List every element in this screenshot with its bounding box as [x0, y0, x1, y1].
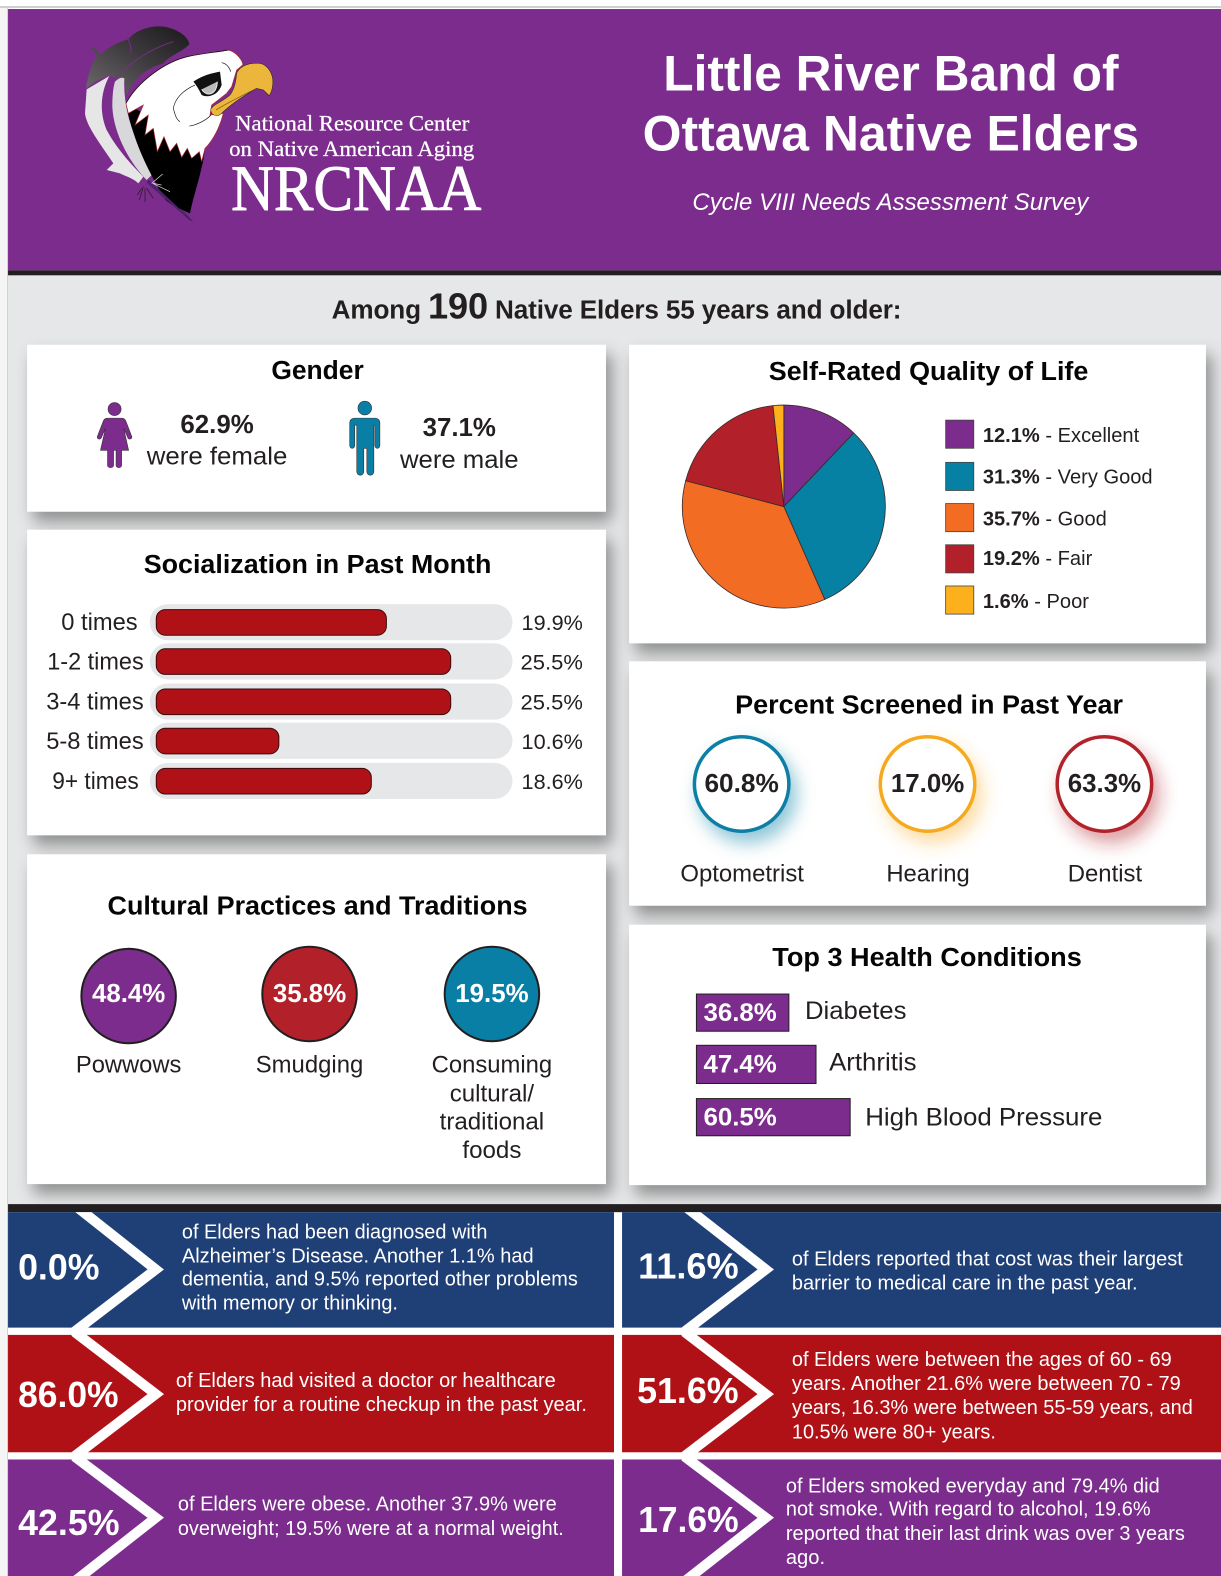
- bar chart: socialization: 10.6%: [522, 731, 583, 754]
- text: age groups: years. Another 21.6% were between 70 - 79: [792, 1373, 1181, 1395]
- text: memory problems: Alzheimer’s Disease. Another 1.1% had: [182, 1245, 534, 1267]
- stat: 0.0%: 0.0%: [18, 1246, 99, 1287]
- title: Little River Band of: [663, 45, 1119, 101]
- callout: cost barrier: [622, 1212, 1221, 1328]
- bar: diabetes: [696, 994, 906, 1031]
- header banner: [8, 9, 1221, 275]
- panel: screenings: [629, 661, 1206, 906]
- bar chart: socialization: 25.5%: [521, 651, 583, 674]
- bar chart: socialization: [46, 604, 583, 799]
- bar chart: socialization: 0 times: [61, 609, 138, 636]
- logo text: [229, 111, 481, 224]
- stat: 51.6%: 51.6%: [637, 1370, 739, 1411]
- logo text: National Resource Center: [235, 111, 470, 136]
- bar chart: socialization: 3-4 times: [46, 689, 144, 716]
- stat: powwows: Powwows: [76, 1051, 181, 1078]
- heading: socialization: Socialization in Past Month: [144, 549, 491, 579]
- text: routine checkup: [176, 1370, 587, 1416]
- text: weight: [178, 1494, 564, 1540]
- stat: 42.5%: 42.5%: [18, 1502, 120, 1543]
- title: Ottawa Native Elders: [643, 105, 1139, 161]
- icon: eagle with feathers: [85, 26, 273, 222]
- bar chart: socialization: 19.9%: [522, 612, 583, 635]
- stat: smudging: Smudging: [256, 1051, 363, 1078]
- text: smoking and alcohol: ago.: [786, 1547, 825, 1569]
- legend: quality of life: 12.1% - Excellent: [983, 425, 1140, 447]
- stat: optometrist: 60.8%: [704, 768, 779, 798]
- stat: smudging: 35.8%: [273, 978, 346, 1008]
- bar chart: socialization: 1-2 times: [47, 648, 144, 675]
- stat: male: 37.1%: [423, 412, 496, 442]
- callout: smoking and alcohol: [622, 1459, 1221, 1576]
- bar: arthritis: 47.4%: [703, 1050, 777, 1078]
- stat: female: 62.9%: [180, 409, 254, 439]
- bar: arthritis: [696, 1045, 917, 1084]
- heading: screenings: Percent Screened in Past Year: [735, 690, 1123, 720]
- text: memory problems: of Elders had been diagnosed with: [182, 1221, 487, 1243]
- stat: traditional foods: 19.5%: [455, 978, 529, 1008]
- bar: high blood pressure: [696, 1099, 1102, 1136]
- panel: health conditions: [629, 925, 1206, 1185]
- heading: gender: Gender: [271, 355, 364, 385]
- heading: quality of life: Self-Rated Quality of Life: [769, 356, 1088, 386]
- bar: high blood pressure: 60.5%: [703, 1104, 777, 1132]
- stat: traditional foods: [432, 947, 552, 1164]
- stat: female: were female: [146, 442, 287, 470]
- stat: powwows: [76, 949, 181, 1078]
- callout: memory problems: [8, 1212, 614, 1328]
- bar chart: socialization: 9+ times: [52, 768, 139, 795]
- stat: hearing: [880, 737, 975, 887]
- text: age groups: [792, 1349, 1193, 1443]
- text: smoking and alcohol: of Elders smoked everyday and 79.4% did: [786, 1476, 1160, 1498]
- legend: quality of life: [946, 420, 1153, 614]
- panel: socialization: [27, 530, 606, 835]
- stat: traditional foods: Consuming: [432, 1051, 552, 1078]
- stat: smudging: [256, 947, 363, 1078]
- stat: optometrist: [680, 737, 804, 887]
- stat: 11.6%: 11.6%: [638, 1245, 739, 1286]
- heading: health conditions: Top 3 Health Conditions: [772, 942, 1082, 972]
- stat: hearing: Hearing: [886, 860, 970, 887]
- text: cost barrier: of Elders reported that cost was their largest: [792, 1248, 1183, 1270]
- bar chart: socialization: 25.5%: [521, 692, 583, 715]
- bar: diabetes: 36.8%: [703, 999, 777, 1027]
- legend: quality of life: 19.2% - Fair: [983, 548, 1093, 570]
- text: routine checkup: provider for a routine checkup in the past year.: [176, 1394, 587, 1416]
- text: age groups: 10.5% were 80+ years.: [792, 1421, 996, 1443]
- logo text: on Native American Aging: [229, 136, 474, 161]
- stat: optometrist: Optometrist: [680, 860, 804, 887]
- callout: age groups: [622, 1335, 1221, 1452]
- pie chart: quality of life: [682, 405, 885, 608]
- text: memory problems: dementia, and 9.5% reported other problems: [182, 1269, 578, 1291]
- chevron arrows: [74, 1208, 766, 1576]
- text: age groups: years, 16.3% were between 55-59 years, and: [792, 1397, 1193, 1419]
- panel: quality of life: [629, 345, 1206, 643]
- text: memory problems: [181, 1221, 578, 1315]
- heading: cultural practices: Cultural Practices and Traditions: [108, 891, 528, 921]
- icon: male figure: [350, 401, 380, 475]
- stat: traditional foods: cultural/: [450, 1081, 534, 1108]
- subtitle: Cycle VIII Needs Assessment Survey: [692, 189, 1090, 216]
- text: cost barrier: [792, 1248, 1183, 1295]
- survey intro heading: Among 190 Native Elders 55 years and older:: [332, 286, 901, 327]
- bar: diabetes: Diabetes: [805, 997, 906, 1025]
- title: [643, 45, 1139, 161]
- text: age groups: of Elders were between the ages of 60 - 69: [792, 1349, 1172, 1371]
- callout: routine checkup: [8, 1335, 614, 1452]
- legend: quality of life: 35.7% - Good: [983, 509, 1107, 531]
- panel: gender: [27, 345, 606, 512]
- stat: traditional foods: foods: [462, 1137, 521, 1164]
- stat: dentist: [1057, 737, 1152, 887]
- text: smoking and alcohol: reported that their last drink was over 3 years: [786, 1523, 1185, 1545]
- legend: quality of life: 31.3% - Very Good: [983, 466, 1153, 488]
- text: routine checkup: of Elders had visited a doctor or healthcare: [176, 1370, 556, 1392]
- callout: weight: [8, 1459, 614, 1576]
- stat: dentist: 63.3%: [1068, 768, 1141, 798]
- bar: arthritis: Arthritis: [829, 1048, 917, 1076]
- panel: cultural practices: [27, 854, 606, 1184]
- legend: quality of life: 1.6% - Poor: [983, 591, 1089, 613]
- logo text: NRCNAA: [231, 153, 481, 224]
- logo: NRCNAA eagle and feathers: [85, 26, 481, 224]
- stat: dentist: Dentist: [1068, 860, 1142, 887]
- stat: female: [146, 409, 287, 470]
- stat: hearing: 17.0%: [891, 768, 964, 798]
- icon: female figure: [97, 403, 132, 468]
- text: weight: of Elders were obese. Another 37.9% were: [178, 1494, 557, 1516]
- stat: powwows: 48.4%: [92, 978, 165, 1008]
- bar chart: socialization: 18.6%: [522, 771, 583, 794]
- text: smoking and alcohol: [786, 1476, 1185, 1569]
- stat: male: [399, 412, 519, 474]
- stat: traditional foods: traditional: [440, 1109, 544, 1136]
- text: smoking and alcohol: not smoke. With regard to alcohol, 19.6%: [786, 1499, 1151, 1521]
- bar chart: socialization: 5-8 times: [46, 728, 144, 755]
- text: memory problems: with memory or thinking.: [181, 1293, 398, 1315]
- bar: high blood pressure: High Blood Pressure: [865, 1104, 1102, 1132]
- stat: 17.6%: 17.6%: [638, 1499, 739, 1540]
- text: weight: overweight; 19.5% were at a normal weight.: [178, 1518, 564, 1540]
- stat: male: were male: [399, 446, 519, 474]
- stat: 86.0%: 86.0%: [18, 1374, 119, 1415]
- text: cost barrier: barrier to medical care in the past year.: [792, 1273, 1138, 1295]
